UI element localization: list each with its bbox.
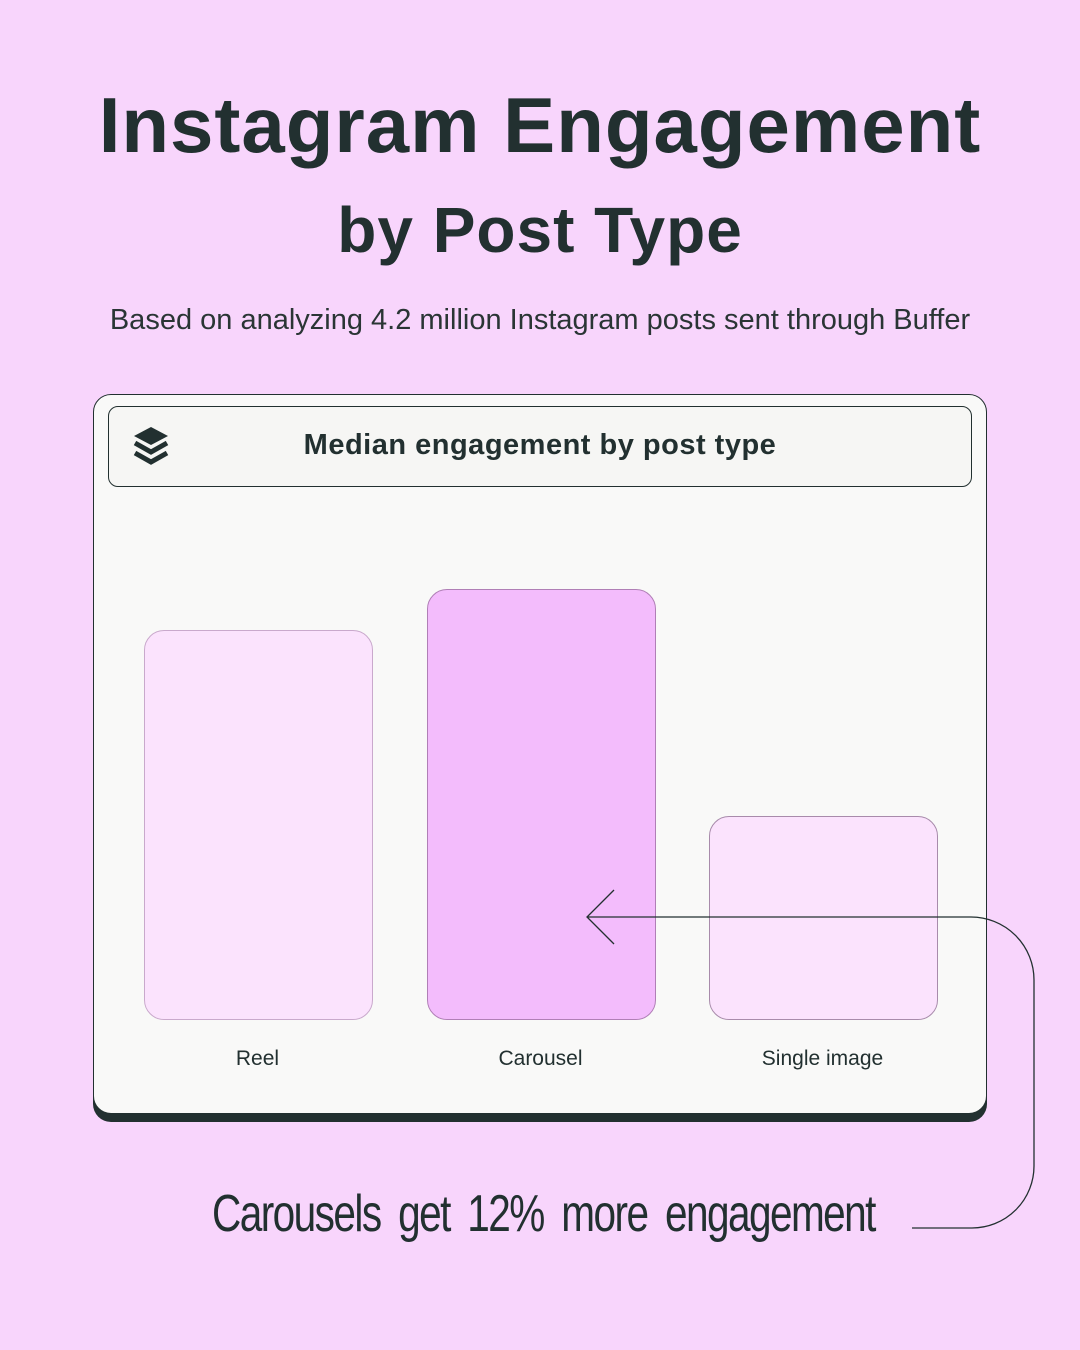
card header [108,406,972,487]
subtitle heading: by Post Type [337,194,743,266]
bar: Carousel [427,589,656,1020]
label: Carousel: Carousel [498,1047,583,1070]
label: Reel: Reel [236,1047,279,1070]
panel: chart card [93,394,987,1114]
bar: Single image [709,816,938,1020]
icon: layers [134,427,168,465]
label: Single image: Single image [762,1047,883,1070]
bar: Reel [144,630,373,1020]
title: Instagram Engagement [99,81,981,169]
header text: Median engagement by post type [304,429,776,461]
description text: Based on analyzing 4.2 million Instagram posts sent through Buffer [110,304,970,336]
callout text: Carousels get 12% more engagement [212,1185,875,1243]
